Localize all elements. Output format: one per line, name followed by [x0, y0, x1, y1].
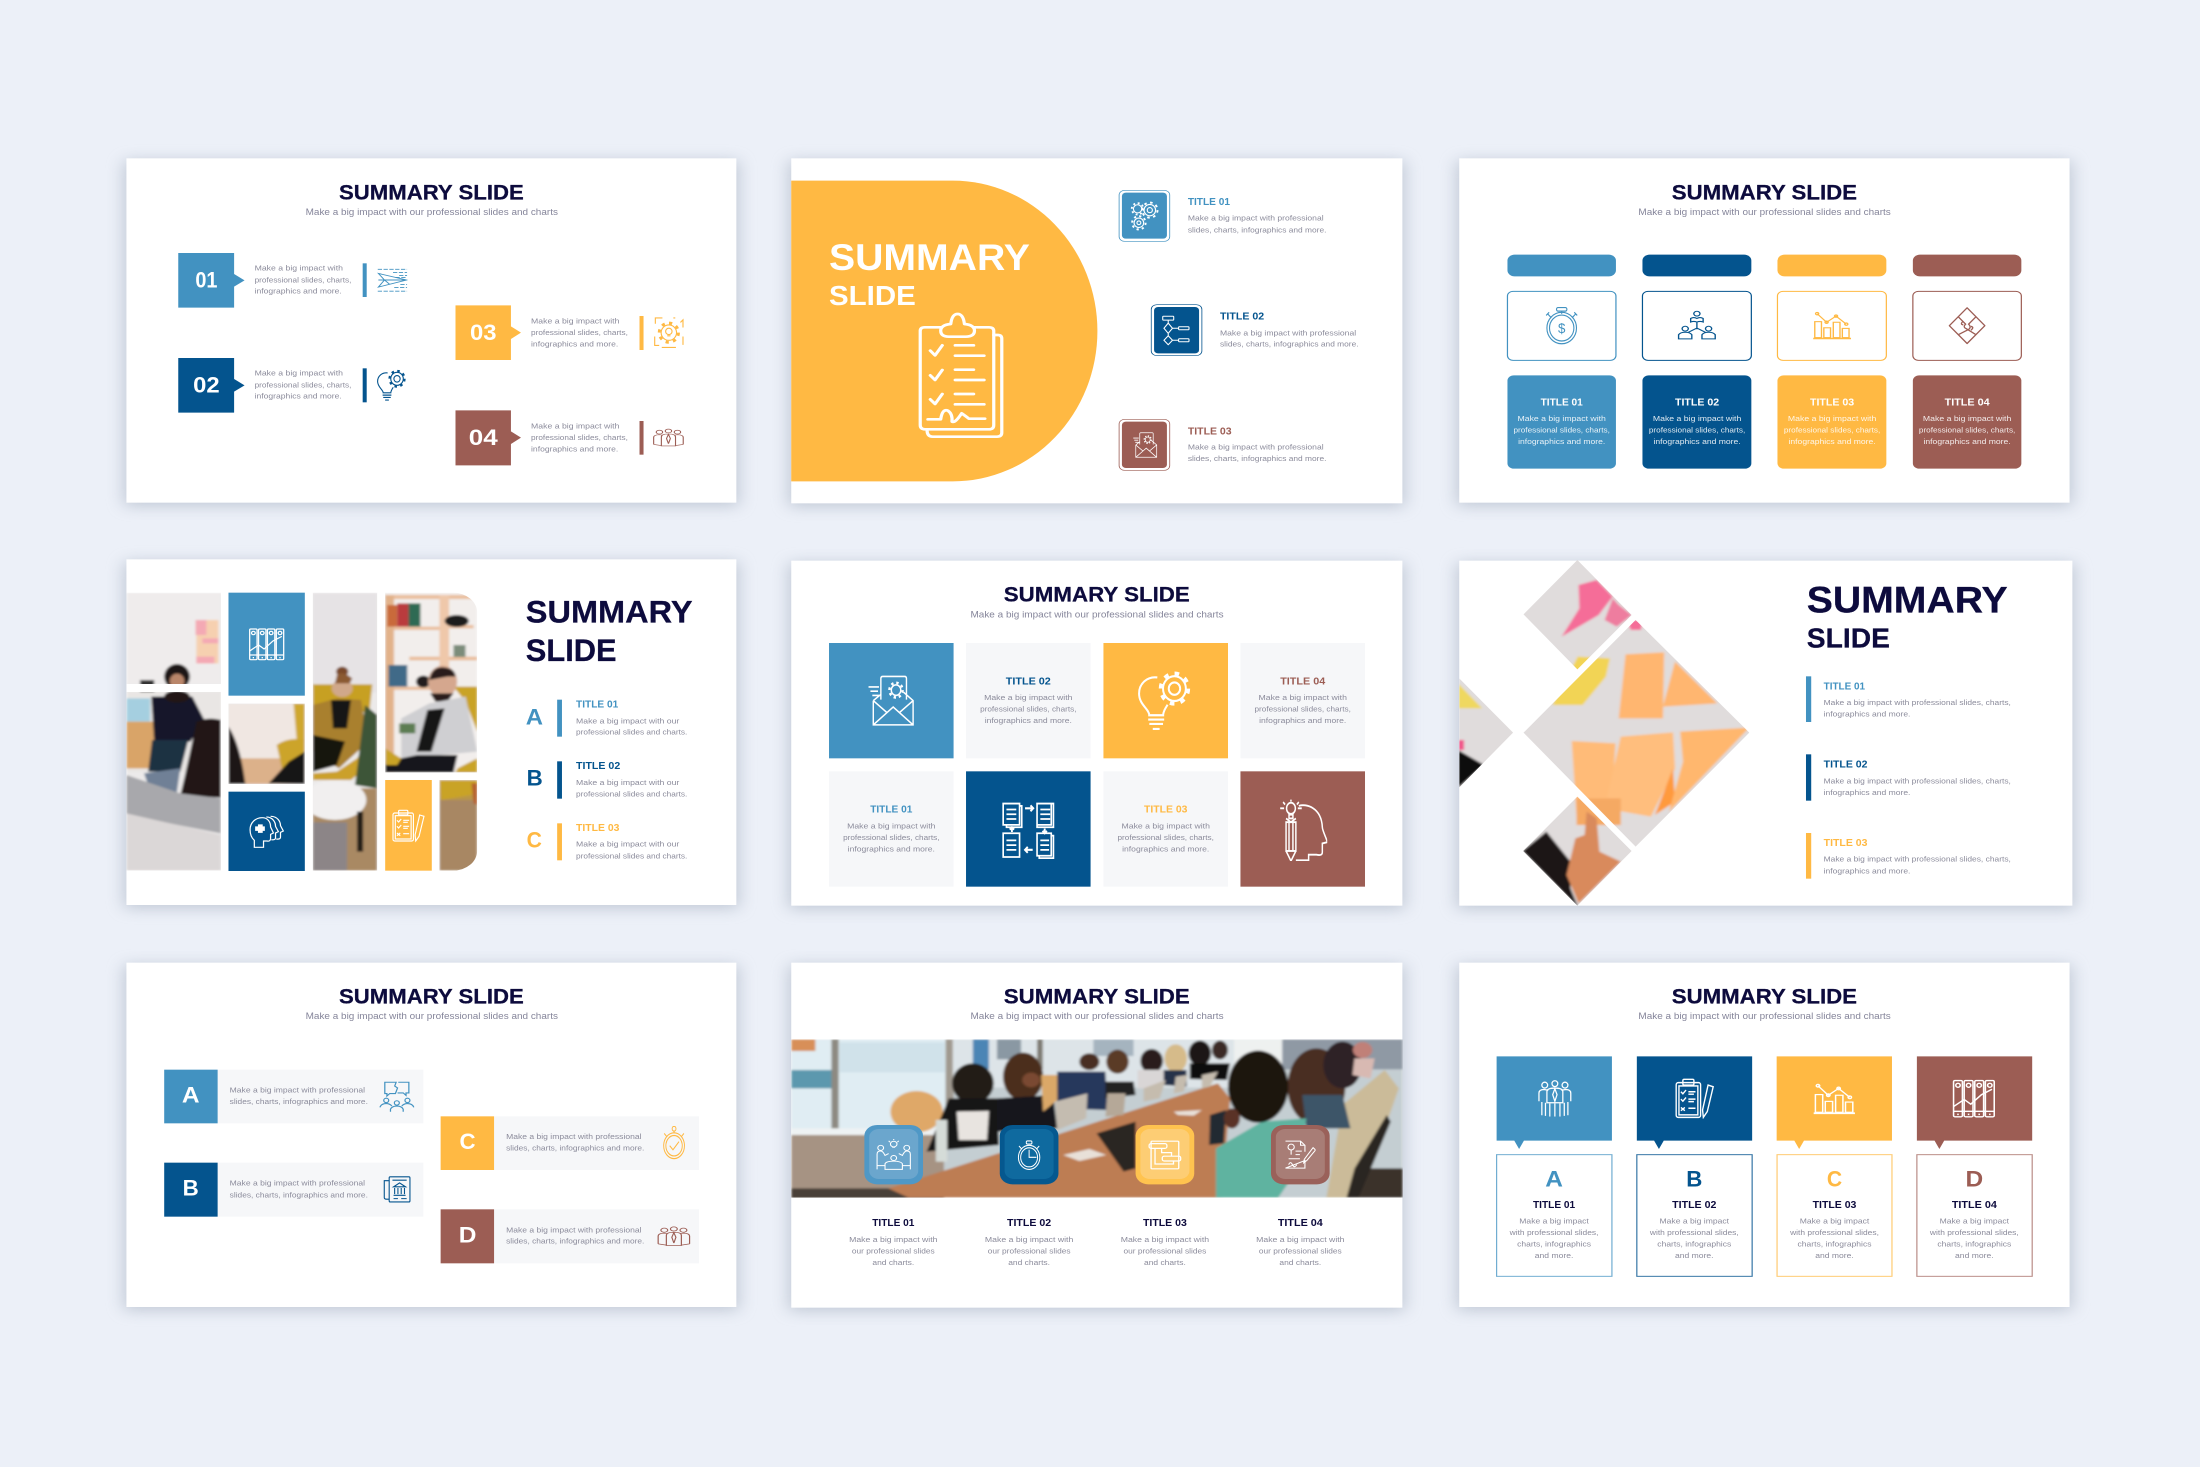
item B [527, 761, 687, 799]
step 01: infographics and more. [255, 286, 342, 295]
card A: with professional slides, [1509, 1228, 1598, 1237]
caption 03: TITLE 03 [1143, 1218, 1187, 1229]
step 02 [178, 358, 405, 413]
card column 4: TITLE 04 [1945, 398, 1990, 408]
tile: mail icon [829, 643, 954, 758]
icon: clipboard [920, 314, 1002, 437]
tile: title 01: professional slides, charts, [843, 833, 940, 842]
card column 4: professional slides, charts, [1919, 425, 2015, 434]
icon tile: flow [1136, 1125, 1194, 1184]
card column 3: Make a big impact with [1788, 414, 1877, 423]
caption 01: Make a big impact with [849, 1235, 938, 1244]
card B [1637, 1056, 1752, 1276]
step 02: infographics and more. [255, 391, 342, 400]
slide 8: photo banner [789, 963, 1405, 1311]
item: title 03 [1806, 833, 2011, 879]
card C: TITLE 03 [1813, 1200, 1856, 1211]
tile: title 02 [966, 643, 1091, 758]
tile: title 01: Make a big impact with [847, 821, 936, 830]
row D: D [459, 1223, 476, 1248]
card column 3: professional slides, charts, [1784, 425, 1880, 434]
item B: Make a big impact with our [576, 778, 679, 787]
row B [164, 1163, 423, 1217]
step 04: infographics and more. [531, 444, 618, 453]
item C [527, 823, 687, 860]
card A [1497, 1056, 1612, 1276]
tile: title 02: infographics and more. [985, 716, 1072, 725]
tile: title 03 [1103, 771, 1228, 887]
caption 01: our professional slides [852, 1246, 935, 1255]
item: title 02: infographics and more. [1824, 788, 1910, 797]
slide 9: callout cards [1457, 963, 2072, 1310]
caption 04: our professional slides [1259, 1246, 1342, 1255]
title: SUMMARY SLIDE [1004, 583, 1190, 606]
caption 03 [1121, 1218, 1209, 1267]
subtitle: Make a big impact with our professional slides and charts [306, 208, 558, 218]
tile: title 04: infographics and more. [1259, 716, 1346, 725]
icon tile: stopwatch [1000, 1125, 1058, 1184]
card D: and more. [1955, 1251, 1994, 1260]
subtitle: Make a big impact with our professional slides and charts [970, 1012, 1224, 1022]
heading: SUMMARY [526, 595, 693, 630]
caption 02: TITLE 02 [1007, 1218, 1051, 1229]
item: title 02: slides, charts, infographics and more. [1220, 339, 1359, 348]
step 04: 04 [469, 426, 498, 450]
item A: A [526, 705, 543, 730]
step 02: professional slides, charts, [255, 380, 351, 389]
tile: title 04 [1240, 643, 1365, 758]
slide 5: checkerboard grid [789, 561, 1405, 909]
caption 03: and charts. [1144, 1258, 1186, 1267]
caption 03: our professional slides [1124, 1246, 1206, 1255]
tile: title 04: professional slides, charts, [1255, 704, 1351, 713]
item: title 03: Make a big impact with professional slides, charts, [1824, 854, 2011, 863]
card column 2: infographics and more. [1654, 437, 1741, 446]
card column 3: infographics and more. [1789, 437, 1876, 446]
step 01: Make a big impact with [255, 263, 343, 272]
card C [1777, 1056, 1892, 1276]
tile: title 04: TITLE 04 [1280, 676, 1326, 687]
heading [526, 595, 693, 668]
item: title 03 [1119, 419, 1326, 470]
yellow panel [791, 181, 1097, 481]
row D: Make a big impact with professional [506, 1225, 642, 1234]
tile: title 02: professional slides, charts, [980, 704, 1077, 713]
caption 04: and charts. [1279, 1258, 1321, 1267]
item: title 03: infographics and more. [1824, 866, 1910, 875]
slide 1: numbered steps [124, 158, 739, 506]
subtitle: Make a big impact with our professional slides and charts [306, 1012, 558, 1022]
step 04 [455, 410, 683, 465]
card column 1: TITLE 01 [1541, 398, 1583, 408]
row B: Make a big impact with professional [230, 1178, 365, 1187]
item: title 01 [1806, 676, 2011, 722]
row D: slides, charts, infographics and more. [506, 1236, 644, 1245]
step 01: 01 [195, 269, 218, 293]
caption 01: and charts. [872, 1258, 914, 1267]
title: SUMMARY SLIDE [1004, 984, 1190, 1008]
tile: title 03: professional slides, charts, [1118, 833, 1214, 842]
item C: TITLE 03 [576, 823, 619, 834]
step 03: Make a big impact with [531, 316, 620, 325]
card A: TITLE 01 [1533, 1200, 1575, 1211]
slide 2: yellow semicircle [789, 158, 1405, 507]
item A: professional slides and charts. [576, 727, 687, 736]
item: title 01: infographics and more. [1824, 709, 1910, 718]
card B: TITLE 02 [1672, 1200, 1716, 1211]
tile: title 01 [829, 771, 954, 887]
card column 1: infographics and more. [1518, 437, 1605, 446]
photo mosaic: office conversation [126, 593, 477, 871]
step 02: Make a big impact with [255, 368, 343, 377]
tile: title 02: TITLE 02 [1006, 676, 1051, 687]
item C: Make a big impact with our [576, 839, 679, 848]
slide 6: diamond photo [1457, 558, 2075, 909]
card B: Make a big impact [1660, 1216, 1730, 1225]
title: SUMMARY SLIDE [1672, 984, 1857, 1008]
row A: A [182, 1084, 200, 1108]
subtitle: Make a big impact with our professional slides and charts [970, 610, 1224, 620]
row C [441, 1116, 699, 1170]
item: title 03: Make a big impact with professional [1188, 442, 1324, 451]
item: title 03: slides, charts, infographics and more. [1188, 454, 1326, 463]
row D [441, 1209, 699, 1263]
item A: TITLE 01 [576, 699, 618, 710]
card C: and more. [1815, 1251, 1854, 1260]
card column 3: TITLE 03 [1810, 398, 1854, 408]
tile: documents icon [966, 771, 1091, 887]
card column 2: TITLE 02 [1675, 398, 1719, 408]
slide 7: lettered rows [124, 963, 739, 1310]
card A: and more. [1535, 1251, 1573, 1260]
item: title 03: TITLE 03 [1188, 426, 1232, 437]
item: title 02: TITLE 02 [1220, 312, 1264, 322]
tile: head pencil icon [1240, 771, 1365, 887]
card B: and more. [1675, 1251, 1714, 1260]
row B: slides, charts, infographics and more. [230, 1190, 368, 1199]
tile: yellow clipboard [385, 780, 432, 871]
title: SUMMARY SLIDE [1672, 180, 1857, 204]
step 03 [455, 305, 683, 360]
caption 02 [985, 1218, 1074, 1267]
caption 04: Make a big impact with [1256, 1235, 1345, 1244]
card C: Make a big impact [1800, 1216, 1870, 1225]
heading: SLIDE [829, 280, 916, 311]
card column 2 [1642, 255, 1751, 469]
card D: D [1965, 1168, 1983, 1192]
card column 1 [1507, 255, 1616, 469]
item B: TITLE 02 [576, 761, 620, 772]
slide 4: photo mosaic [124, 559, 739, 908]
card D: charts, infographics [1937, 1239, 2011, 1248]
caption 03: Make a big impact with [1121, 1235, 1209, 1244]
row A [164, 1070, 423, 1123]
tile: title 01: infographics and more. [848, 844, 935, 853]
card column 1: professional slides, charts, [1513, 425, 1610, 434]
card column 2: Make a big impact with [1653, 414, 1742, 423]
item: title 01 [1119, 190, 1326, 241]
row A: Make a big impact with professional [230, 1085, 365, 1094]
tile: title 03: TITLE 03 [1144, 805, 1187, 815]
card D: Make a big impact [1940, 1216, 2010, 1225]
subtitle: Make a big impact with our professional slides and charts [1638, 208, 1891, 218]
step 04: professional slides, charts, [531, 433, 628, 442]
item: title 02 [1806, 754, 2011, 801]
tile: navy heads [228, 792, 305, 871]
card A: charts, infographics [1517, 1239, 1591, 1248]
row C: C [460, 1130, 476, 1154]
item: title 03: TITLE 03 [1824, 838, 1867, 849]
item: title 02 [1151, 305, 1359, 356]
slide 3: four cards with pills [1457, 158, 2072, 506]
step 03: infographics and more. [531, 339, 618, 348]
card D: TITLE 04 [1952, 1200, 1998, 1211]
card column 4: Make a big impact with [1923, 414, 2012, 423]
item: title 01: TITLE 01 [1824, 681, 1865, 692]
icon tile: meeting [864, 1125, 923, 1184]
item: title 01: slides, charts, infographics and more. [1188, 225, 1326, 234]
item: title 01: Make a big impact with professional slides, charts, [1824, 698, 2011, 707]
row C: slides, charts, infographics and more. [506, 1143, 644, 1152]
heading: SUMMARY [829, 237, 1030, 278]
infographic canvas [116, 154, 2082, 1318]
card A: A [1545, 1168, 1563, 1192]
card C: with professional slides, [1789, 1228, 1879, 1237]
item A [526, 699, 687, 737]
card B: charts, infographics [1657, 1239, 1731, 1248]
item: title 02: Make a big impact with professional slides, charts, [1824, 776, 2011, 785]
caption 02: Make a big impact with [985, 1235, 1074, 1244]
heading: SLIDE [526, 633, 617, 668]
caption 02: our professional slides [988, 1246, 1070, 1255]
item B: B [527, 767, 543, 791]
step 01: professional slides, charts, [255, 275, 351, 284]
card A: Make a big impact [1519, 1216, 1589, 1225]
item: title 01: Make a big impact with professional [1188, 213, 1324, 222]
item C: C [527, 829, 542, 853]
card D: with professional slides, [1929, 1228, 2019, 1237]
row B: B [183, 1177, 199, 1201]
item B: professional slides and charts. [576, 789, 687, 798]
tile: title 01: TITLE 01 [870, 805, 912, 815]
photo diamonds: sticky notes [1458, 558, 1751, 908]
card B: with professional slides, [1649, 1228, 1739, 1237]
step 02: 02 [193, 374, 220, 398]
item C: professional slides and charts. [576, 851, 687, 860]
tile: bulb gear icon [1103, 643, 1228, 758]
heading: SUMMARY [1807, 579, 2008, 620]
tile: title 02: Make a big impact with [984, 693, 1073, 702]
heading [829, 237, 1030, 311]
item: title 02: Make a big impact with professional [1220, 328, 1356, 337]
tile: title 04: Make a big impact with [1259, 693, 1347, 702]
card column 3 [1777, 255, 1886, 469]
subtitle: Make a big impact with our professional slides and charts [1638, 1012, 1891, 1022]
card D [1917, 1056, 2032, 1276]
card column 4 [1913, 255, 2021, 469]
card C: C [1827, 1168, 1842, 1192]
card column 1: Make a big impact with [1518, 414, 1606, 423]
title: SUMMARY SLIDE [339, 984, 524, 1008]
step 01 [178, 253, 407, 308]
caption 01: TITLE 01 [872, 1218, 914, 1229]
caption 02: and charts. [1008, 1258, 1050, 1267]
caption 04: TITLE 04 [1278, 1218, 1324, 1229]
caption 04 [1256, 1218, 1345, 1267]
tile: title 03: Make a big impact with [1122, 821, 1210, 830]
step 04: Make a big impact with [531, 421, 620, 430]
title: SUMMARY SLIDE [339, 180, 524, 204]
tile: title 03: infographics and more. [1122, 844, 1209, 853]
heading: SLIDE [1807, 622, 1890, 654]
item A: Make a big impact with our [576, 716, 679, 725]
card B: B [1686, 1168, 1702, 1192]
row C: Make a big impact with professional [506, 1132, 642, 1141]
tile: blue binders [228, 593, 305, 696]
step 03: professional slides, charts, [531, 328, 628, 337]
caption 01 [849, 1218, 938, 1267]
item: title 02: TITLE 02 [1824, 760, 1867, 770]
card column 2: professional slides, charts, [1649, 425, 1745, 434]
icon tile: contract [1271, 1125, 1330, 1184]
card column 4: infographics and more. [1924, 437, 2011, 446]
photo banner: team meeting [791, 1039, 1403, 1198]
step 03: 03 [470, 321, 496, 345]
card C: charts, infographics [1798, 1239, 1871, 1248]
heading [1807, 579, 2008, 654]
row A: slides, charts, infographics and more. [230, 1097, 368, 1106]
item: title 01: TITLE 01 [1188, 197, 1230, 208]
